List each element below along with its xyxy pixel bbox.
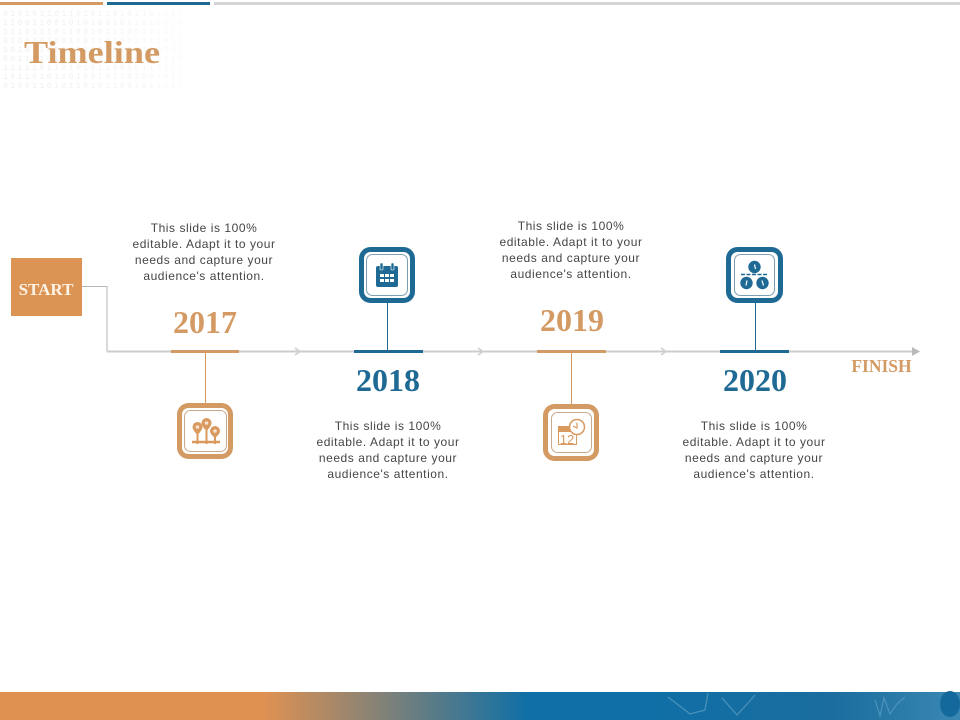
background binary pattern [3, 10, 186, 91]
description 2017: needs and capture your [135, 253, 273, 267]
finish label: FINISH [851, 356, 912, 376]
start box [11, 258, 82, 316]
year 2018: 2018 [356, 362, 420, 398]
start box: START [19, 280, 74, 299]
bottom gradient band [0, 691, 960, 720]
background binary pattern: 1111101101010110010110101 [3, 64, 186, 73]
description 2018: needs and capture your [319, 451, 457, 465]
timeline axis with arrows [82, 286, 920, 356]
milestone 2019 [499, 219, 643, 458]
milestone 2020 [682, 250, 826, 481]
background binary pattern: 0101011011010110101101011 [3, 10, 186, 19]
description 2019: editable. Adapt it to your [499, 235, 643, 249]
title: Timeline [24, 34, 160, 70]
icon: calendar with clock [546, 406, 596, 458]
milestone 2018 [316, 250, 460, 481]
icon: calendar with clock: 12 [560, 432, 574, 447]
description 2019: audience's attention. [510, 267, 632, 281]
description 2019: needs and capture your [502, 251, 640, 265]
description 2018: editable. Adapt it to your [316, 435, 460, 449]
background binary pattern: 0011010110011011010010110 [3, 55, 186, 64]
year 2019: 2019 [540, 302, 604, 338]
description 2019: This slide is 100% [518, 219, 624, 233]
description 2020: This slide is 100% [701, 419, 807, 433]
background binary pattern: 1011010110100101101001011 [3, 73, 186, 82]
background binary pattern: 1110111011001011100101101 [3, 28, 186, 37]
year 2017: 2017 [173, 304, 237, 340]
marker 2019 [537, 350, 606, 404]
description 2020: needs and capture your [685, 451, 823, 465]
marker 2018 [354, 303, 423, 353]
icon: location pins on a line [180, 406, 230, 456]
description 2018: audience's attention. [327, 467, 449, 481]
background binary pattern: 1010110010110010110100101 [3, 46, 186, 55]
milestone 2017 [132, 221, 276, 456]
icon: calendar [362, 250, 412, 300]
description 2017: This slide is 100% [151, 221, 257, 235]
background binary pattern: 1100110010101001011010010 [3, 19, 186, 28]
description 2018: This slide is 100% [335, 419, 441, 433]
description 2017: editable. Adapt it to your [132, 237, 276, 251]
description 2020: editable. Adapt it to your [682, 435, 826, 449]
background binary pattern: 0101101001101101001011010 [3, 37, 186, 46]
background binary pattern: 0100110101101011001011010 [3, 82, 186, 91]
description 2020: audience's attention. [693, 467, 815, 481]
icon: network nodes [728, 250, 780, 300]
top accent bars [0, 2, 960, 5]
year 2020: 2020 [723, 362, 787, 398]
marker 2020 [720, 303, 789, 353]
marker 2017 [171, 350, 239, 403]
description 2017: audience's attention. [143, 269, 265, 283]
